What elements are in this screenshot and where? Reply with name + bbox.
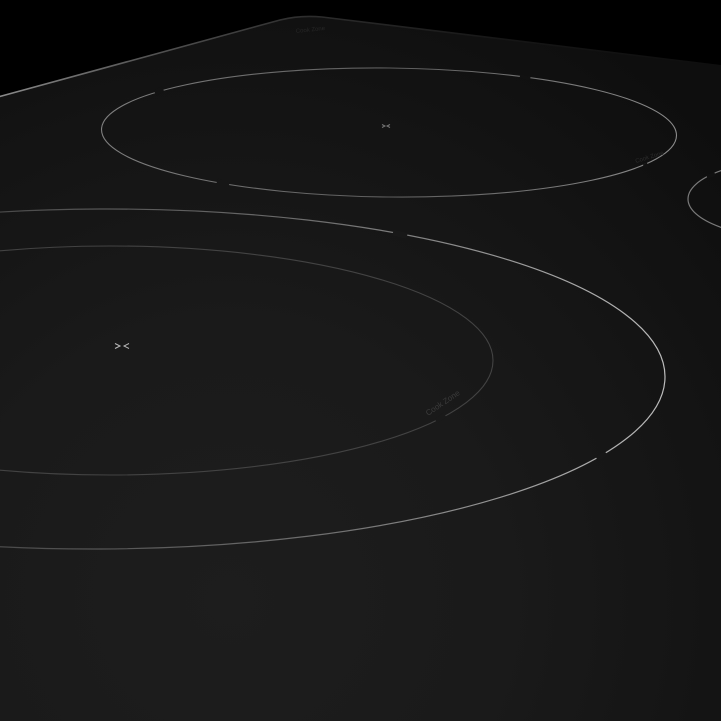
panel top edge highlight	[0, 16, 721, 97]
large cooking zone outer ring	[0, 207, 666, 551]
brand mark on panel edge: Cook Zone	[296, 26, 326, 35]
label: inner zone: Cook Zone	[424, 388, 462, 418]
top cooking zone	[101, 65, 677, 200]
icon: top zone centre mark	[382, 124, 390, 128]
icon: large zone centre mark	[115, 344, 129, 348]
right cooking zone	[688, 159, 721, 239]
label: top zone: Cook Zone	[635, 150, 665, 165]
large cooking zone inner ring	[0, 246, 493, 475]
